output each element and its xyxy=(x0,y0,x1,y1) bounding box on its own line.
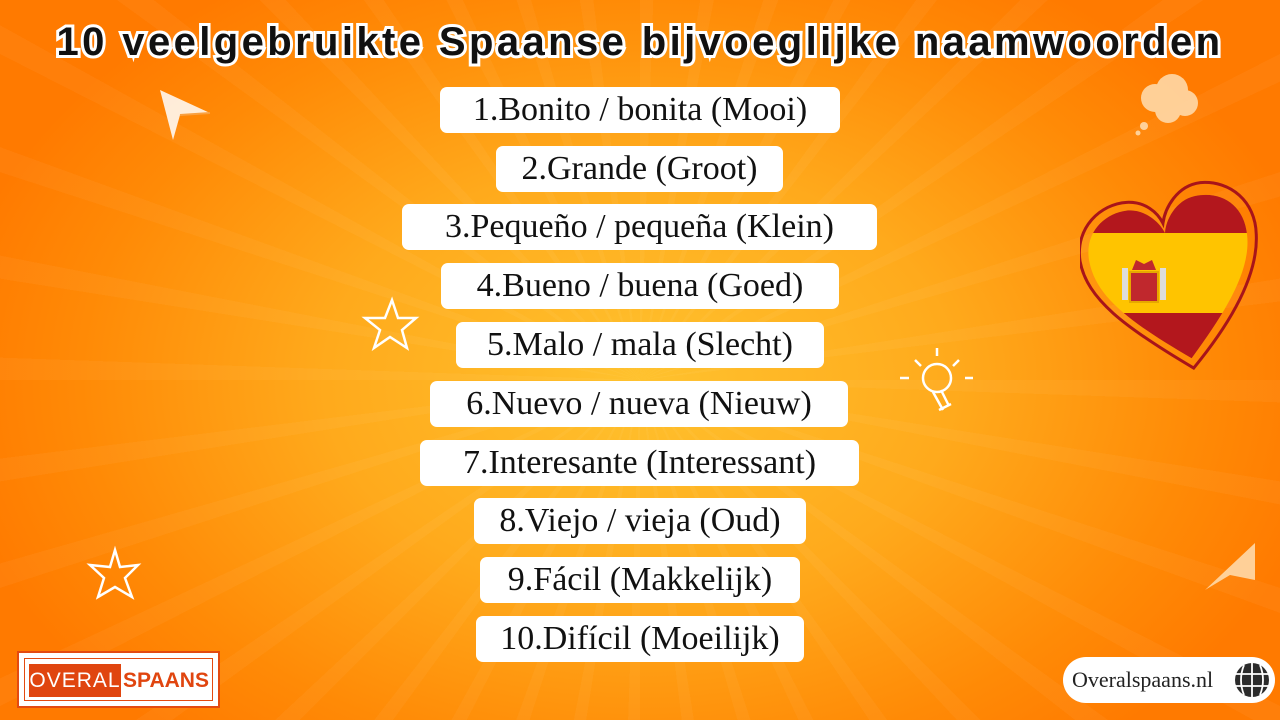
list item 2 xyxy=(496,146,783,192)
list item 10: 10.Difícil (Moeilijk) xyxy=(500,620,780,657)
list item 5 xyxy=(456,322,824,368)
icon: light bulb xyxy=(900,348,973,412)
list item 1 xyxy=(440,87,840,133)
icon: star bottom-left xyxy=(86,546,142,600)
icon: globe xyxy=(1235,663,1269,697)
icon: paper plane bottom-right xyxy=(1205,543,1255,590)
list item 9: 9.Fácil (Makkelijk) xyxy=(508,561,772,598)
list item 5: 5.Malo / mala (Slecht) xyxy=(487,326,793,363)
list item 3: 3.Pequeño / pequeña (Klein) xyxy=(445,208,834,245)
website pill: Overalspaans.nl xyxy=(1072,667,1213,692)
list item 8: 8.Viejo / vieja (Oud) xyxy=(499,502,781,539)
list item 9 xyxy=(480,557,800,603)
list item 4 xyxy=(441,263,839,309)
list item 7 xyxy=(420,440,859,486)
icon: spanish flag heart xyxy=(1080,180,1258,370)
list item 6 xyxy=(430,381,848,427)
title: 10 veelgebruikte Spaanse bijvoeglijke naamwoorden xyxy=(56,20,1223,64)
logo: Overal Spaans: SPAANS xyxy=(123,669,209,692)
list item 6: 6.Nuevo / nueva (Nieuw) xyxy=(466,385,812,422)
website pill xyxy=(1063,657,1275,703)
list item 1: 1.Bonito / bonita (Mooi) xyxy=(473,91,807,128)
list item 7: 7.Interesante (Interessant) xyxy=(463,444,816,481)
logo: Overal Spaans xyxy=(17,651,220,708)
icon: thought cloud xyxy=(1136,74,1198,136)
icon: star middle-left xyxy=(362,296,420,351)
list item 10 xyxy=(476,616,804,662)
list item 4: 4.Bueno / buena (Goed) xyxy=(477,267,803,304)
icon: paper plane top-left xyxy=(160,90,210,140)
list item 8 xyxy=(474,498,806,544)
list item 3 xyxy=(402,204,877,250)
logo: Overal Spaans: OVERAL xyxy=(29,669,121,692)
list item 2: 2.Grande (Groot) xyxy=(521,150,758,187)
